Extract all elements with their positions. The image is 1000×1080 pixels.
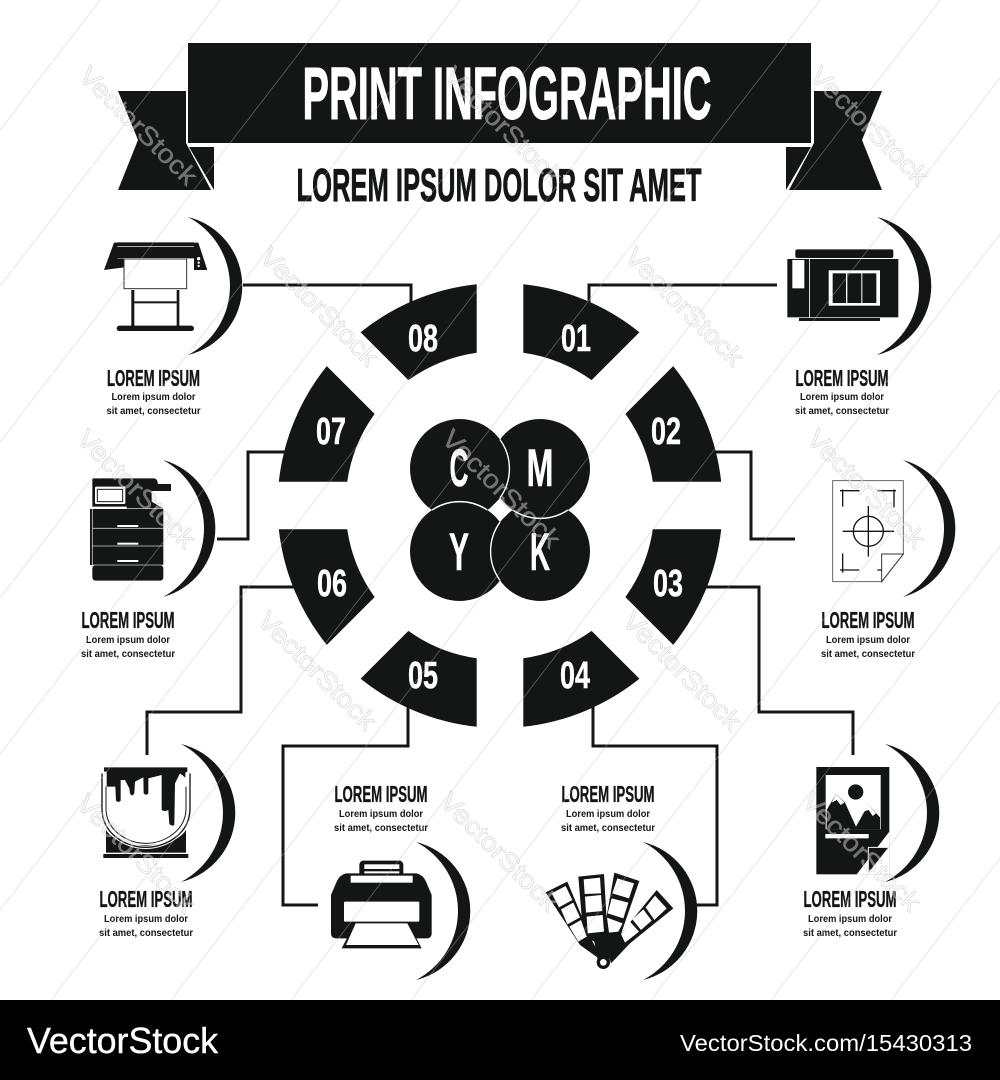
segment 02: 02 xyxy=(651,411,681,453)
watermark text: VectorStock xyxy=(434,786,566,918)
segment 01: 01 xyxy=(561,318,591,360)
label: bottom far right xyxy=(803,886,897,939)
icon: paint can xyxy=(102,767,190,858)
watermark text xyxy=(71,60,936,920)
segment 02 xyxy=(625,366,721,482)
label: top left: LOREM IPSUM xyxy=(107,365,200,391)
label: bottom inner left: sit amet, consectetur xyxy=(334,822,428,834)
footer brand: VectorStock xyxy=(27,1020,219,1061)
label: bottom inner right xyxy=(561,781,655,834)
label: top right: Lorem ipsum dolor xyxy=(800,391,884,403)
label: bottom inner left xyxy=(334,781,428,834)
segment 03: 03 xyxy=(653,563,683,605)
segment 06 xyxy=(279,529,375,645)
right ribbon tail xyxy=(786,91,882,190)
watermark text: VectorStock xyxy=(254,241,386,373)
label: bottom inner left: Lorem ipsum dolor xyxy=(339,808,423,820)
label: bottom far left: LOREM IPSUM xyxy=(100,886,192,912)
segment 04: 04 xyxy=(560,655,590,697)
watermark text: VectorStock xyxy=(617,605,749,737)
icon: desktop printer xyxy=(331,861,432,948)
title banner xyxy=(188,43,811,143)
label: bottom far right: sit amet, consectetur xyxy=(803,927,897,939)
segment 08 xyxy=(361,284,477,380)
CMYK circles xyxy=(410,419,590,601)
segment 05: 05 xyxy=(408,655,438,697)
icon: large format plotter xyxy=(104,242,207,331)
label: top left: Lorem ipsum dolor xyxy=(112,391,196,403)
label: top right: sit amet, consectetur xyxy=(795,405,889,417)
watermark text: VectorStock xyxy=(71,423,203,555)
label: bottom far right: LOREM IPSUM xyxy=(804,886,896,912)
left ribbon tail xyxy=(118,91,214,190)
crescents xyxy=(163,217,955,980)
label: middle left: sit amet, consectetur xyxy=(81,648,175,660)
watermark text: VectorStock xyxy=(801,423,933,555)
label: top left xyxy=(106,365,200,417)
label: bottom far left: sit amet, consectetur xyxy=(99,927,193,939)
label: middle left: LOREM IPSUM xyxy=(82,607,174,633)
label: middle right xyxy=(821,607,915,660)
label: bottom inner right: LOREM IPSUM xyxy=(562,781,654,807)
segment 08: 08 xyxy=(408,318,438,360)
icon: wide printer box xyxy=(787,249,898,321)
label: middle left: Lorem ipsum dolor xyxy=(86,634,170,646)
label: bottom far left: Lorem ipsum dolor xyxy=(104,913,188,925)
label: middle right: LOREM IPSUM xyxy=(822,607,914,633)
label: middle right: sit amet, consectetur xyxy=(821,648,915,660)
watermark text: VectorStock xyxy=(252,605,384,737)
icon: photo poster xyxy=(816,767,889,874)
watermark text: VectorStock xyxy=(619,241,751,373)
CMYK circles: M xyxy=(526,439,554,498)
watermark text: VectorStock xyxy=(71,788,203,920)
segment 01 xyxy=(523,284,639,380)
segment 05 xyxy=(361,631,477,727)
segment 03 xyxy=(625,529,721,645)
label: middle right: Lorem ipsum dolor xyxy=(826,634,910,646)
segmented ring xyxy=(279,284,721,727)
watermark text: VectorStock xyxy=(804,60,936,192)
segment 07: 07 xyxy=(316,411,346,453)
icon: registration marks sheet xyxy=(833,481,903,582)
icon: office copier xyxy=(90,478,171,581)
label: bottom inner left: LOREM IPSUM xyxy=(334,781,428,807)
footer url: VectorStock.com/15430313 xyxy=(680,1030,972,1056)
watermark text: VectorStock xyxy=(438,60,570,192)
label: middle left xyxy=(81,607,175,660)
CMYK circles: K xyxy=(530,523,550,582)
CMYK circles: C xyxy=(450,439,468,498)
watermark text: VectorStock xyxy=(73,60,205,192)
icon: color swatch fan xyxy=(546,873,673,969)
label: bottom inner right: sit amet, consectetur xyxy=(561,822,655,834)
segment 06: 06 xyxy=(317,563,347,605)
CMYK circles: Y xyxy=(449,523,469,582)
label: bottom inner right: Lorem ipsum dolor xyxy=(566,808,650,820)
label: bottom far left xyxy=(99,886,193,939)
label: top left: sit amet, consectetur xyxy=(106,405,200,417)
label: top right xyxy=(795,365,889,417)
connector lines xyxy=(147,285,853,905)
label: top right: LOREM IPSUM xyxy=(796,365,888,391)
footer bar xyxy=(0,1000,1000,1080)
segment 04 xyxy=(523,631,639,727)
segment 07 xyxy=(279,366,375,482)
watermark text: VectorStock xyxy=(436,423,568,555)
label: bottom far right: Lorem ipsum dolor xyxy=(808,913,892,925)
watermark text: VectorStock xyxy=(796,786,928,918)
